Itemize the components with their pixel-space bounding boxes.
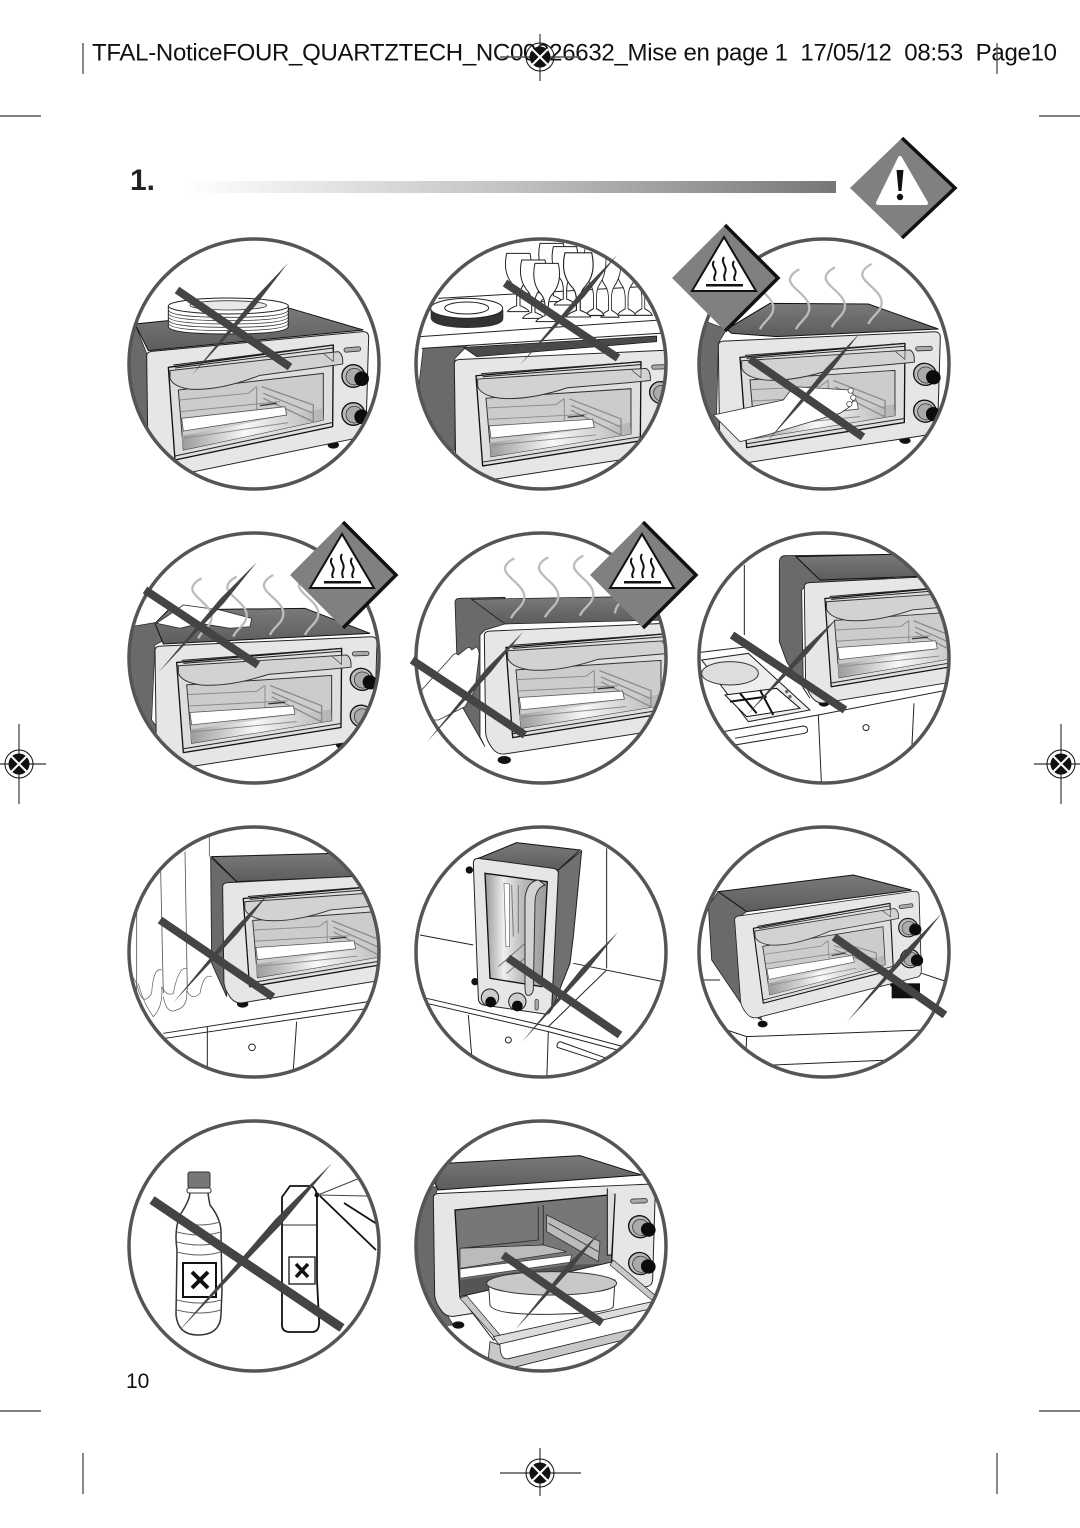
icon: general warning diamond	[850, 138, 955, 238]
icon: hot surface diamond, panel 3	[672, 225, 778, 331]
panel 7: oven next to curtains	[127, 825, 381, 1079]
panel 2: shelf with glasses above oven	[410, 239, 677, 492]
icon: hot surface diamond, panel 4	[290, 522, 396, 628]
page number: 10	[126, 1370, 149, 1393]
panel 4: hand on oven top	[127, 533, 379, 783]
icon: spray can	[282, 1178, 380, 1332]
section gradient bar	[185, 181, 836, 193]
icon: bottle	[176, 1172, 222, 1335]
registration mark right	[1047, 750, 1075, 778]
panel 1: plates on oven	[120, 239, 379, 489]
panel 9: oven overhanging worktop edge	[699, 827, 949, 1077]
panel 3: hand inside hot oven	[693, 239, 949, 489]
panel 8: oven standing on end	[416, 827, 666, 1083]
registration mark bottom	[526, 1459, 554, 1487]
panel 10: flammable bottle and spray can	[129, 1121, 380, 1371]
panel 11: oversized dish on open door	[410, 1121, 666, 1371]
panel 6: oven next to hob	[697, 531, 951, 785]
icon: hot surface diamond, panel 5	[590, 522, 696, 628]
panel 5: hand on oven side	[410, 531, 668, 785]
print slug header text: TFAL-NoticeFOUR_QUARTZTECH_NC00026632_Mise en page 1 17/05/12 08:53 Page10	[92, 40, 1057, 66]
registration mark left	[5, 750, 33, 778]
section number: 1.	[130, 164, 155, 197]
registration mark top	[526, 43, 554, 71]
